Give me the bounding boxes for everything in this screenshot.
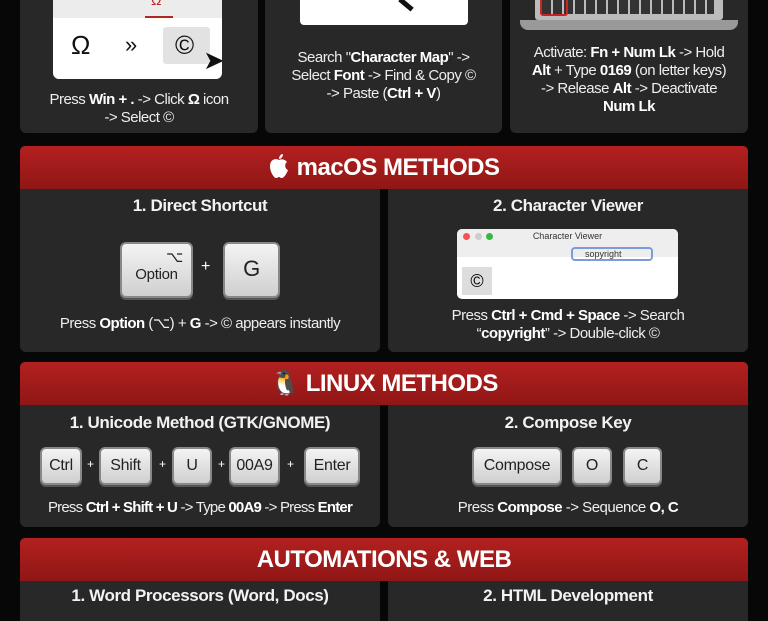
icon: option key bbox=[120, 242, 193, 298]
icon: character viewer window: © bbox=[470, 271, 484, 291]
text: character map instructions bbox=[291, 49, 476, 102]
text: windows emoji instructions bbox=[49, 91, 229, 126]
text: alt code instructions: Alt + Type 0169 (on letter keys) bbox=[532, 62, 726, 79]
panel: unicode method bbox=[20, 405, 380, 527]
icon: key row: U bbox=[186, 457, 198, 474]
icon: emoji picker window: Ω bbox=[71, 30, 90, 60]
heading: character viewer: 2. Character Viewer bbox=[493, 196, 643, 215]
icon: G key bbox=[223, 242, 280, 298]
text: character map instructions: Search "Character Map" -> bbox=[298, 49, 469, 66]
icon: emoji picker window bbox=[53, 0, 222, 79]
icon: key row: + bbox=[218, 457, 225, 471]
panel: word processors bbox=[20, 581, 380, 621]
icon: G key: G bbox=[243, 256, 260, 281]
heading: html development: 2. HTML Development bbox=[483, 586, 653, 605]
icon: key row: Ctrl bbox=[49, 457, 73, 474]
heading: automations & web bbox=[20, 538, 748, 581]
icon: character viewer window: sopyright bbox=[585, 249, 622, 259]
icon: character viewer window bbox=[457, 229, 678, 299]
icon: key row bbox=[40, 447, 360, 487]
heading: macOS methods bbox=[20, 146, 748, 189]
text: compose instructions: Press Compose -> Sequence O, C bbox=[458, 499, 678, 516]
icon: option key: Option bbox=[135, 266, 178, 283]
text: alt code instructions: Num Lk bbox=[603, 98, 655, 115]
text: character viewer instructions bbox=[452, 307, 684, 342]
icon: key row: Shift bbox=[110, 457, 141, 474]
heading: linux methods: 🐧 LINUX METHODS bbox=[270, 370, 498, 397]
text: character map instructions: -> Paste (Ctrl + V) bbox=[327, 85, 440, 102]
heading: direct shortcut: 1. Direct Shortcut bbox=[133, 196, 267, 215]
icon: option key: ⌥ bbox=[166, 249, 183, 266]
icon: compose keys: Compose bbox=[484, 457, 550, 474]
heading: automations & web: AUTOMATIONS & WEB bbox=[257, 546, 511, 573]
icon: compose keys: O bbox=[586, 457, 598, 474]
panel: html development bbox=[388, 581, 748, 621]
panel: character viewer bbox=[388, 189, 748, 352]
text: character viewer instructions: “copyright” -> Double-click © bbox=[477, 325, 659, 342]
text: windows emoji instructions: Press Win + . -> Click Ω icon bbox=[49, 91, 229, 108]
heading: compose key: 2. Compose Key bbox=[505, 413, 631, 432]
icon: emoji picker window: © bbox=[175, 30, 194, 60]
panel: direct shortcut bbox=[20, 189, 380, 352]
icon: character viewer window: Character Viewer bbox=[533, 231, 602, 241]
icon: compose keys: C bbox=[637, 457, 648, 474]
text: option shortcut: Press Option (⌥) + G -> © appears instantly bbox=[60, 315, 340, 332]
text: character map instructions: Select Font -> Find & Copy © bbox=[291, 67, 476, 84]
text: alt code instructions: Activate: Fn + Num Lk -> Hold bbox=[534, 44, 724, 61]
text: alt code instructions: -> Release Alt -> Deactivate bbox=[541, 80, 717, 97]
icon: key row: + bbox=[87, 457, 94, 471]
text: unicode instructions: Press Ctrl + Shift + U -> Type 00A9 -> Press Enter bbox=[48, 499, 352, 516]
panel: windows emoji panel bbox=[20, 0, 258, 133]
icon: emoji picker window: » bbox=[125, 32, 137, 57]
text: alt code instructions bbox=[532, 44, 726, 115]
icon: key row: 00A9 bbox=[236, 457, 273, 474]
panel: compose key bbox=[388, 405, 748, 527]
panel: alt code bbox=[510, 0, 748, 133]
text: character viewer instructions: Press Ctrl + Cmd + Space -> Search bbox=[452, 307, 684, 324]
panel: character map bbox=[265, 0, 502, 133]
icon: compose keys bbox=[472, 447, 662, 487]
panel: direct shortcut: + bbox=[201, 258, 210, 275]
heading: linux methods bbox=[20, 362, 748, 405]
icon: search box bbox=[300, 0, 468, 25]
icon: key row: + bbox=[287, 457, 294, 471]
text: windows emoji instructions: -> Select © bbox=[104, 109, 174, 126]
heading: unicode method: 1. Unicode Method (GTK/GNOME) bbox=[70, 413, 330, 432]
heading: word processors: 1. Word Processors (Word, Docs) bbox=[71, 586, 329, 605]
icon: laptop bbox=[520, 0, 738, 30]
icon: key row: Enter bbox=[314, 457, 350, 474]
icon: key row: + bbox=[159, 457, 166, 471]
heading: macOS methods: macOS METHODS bbox=[297, 154, 500, 181]
